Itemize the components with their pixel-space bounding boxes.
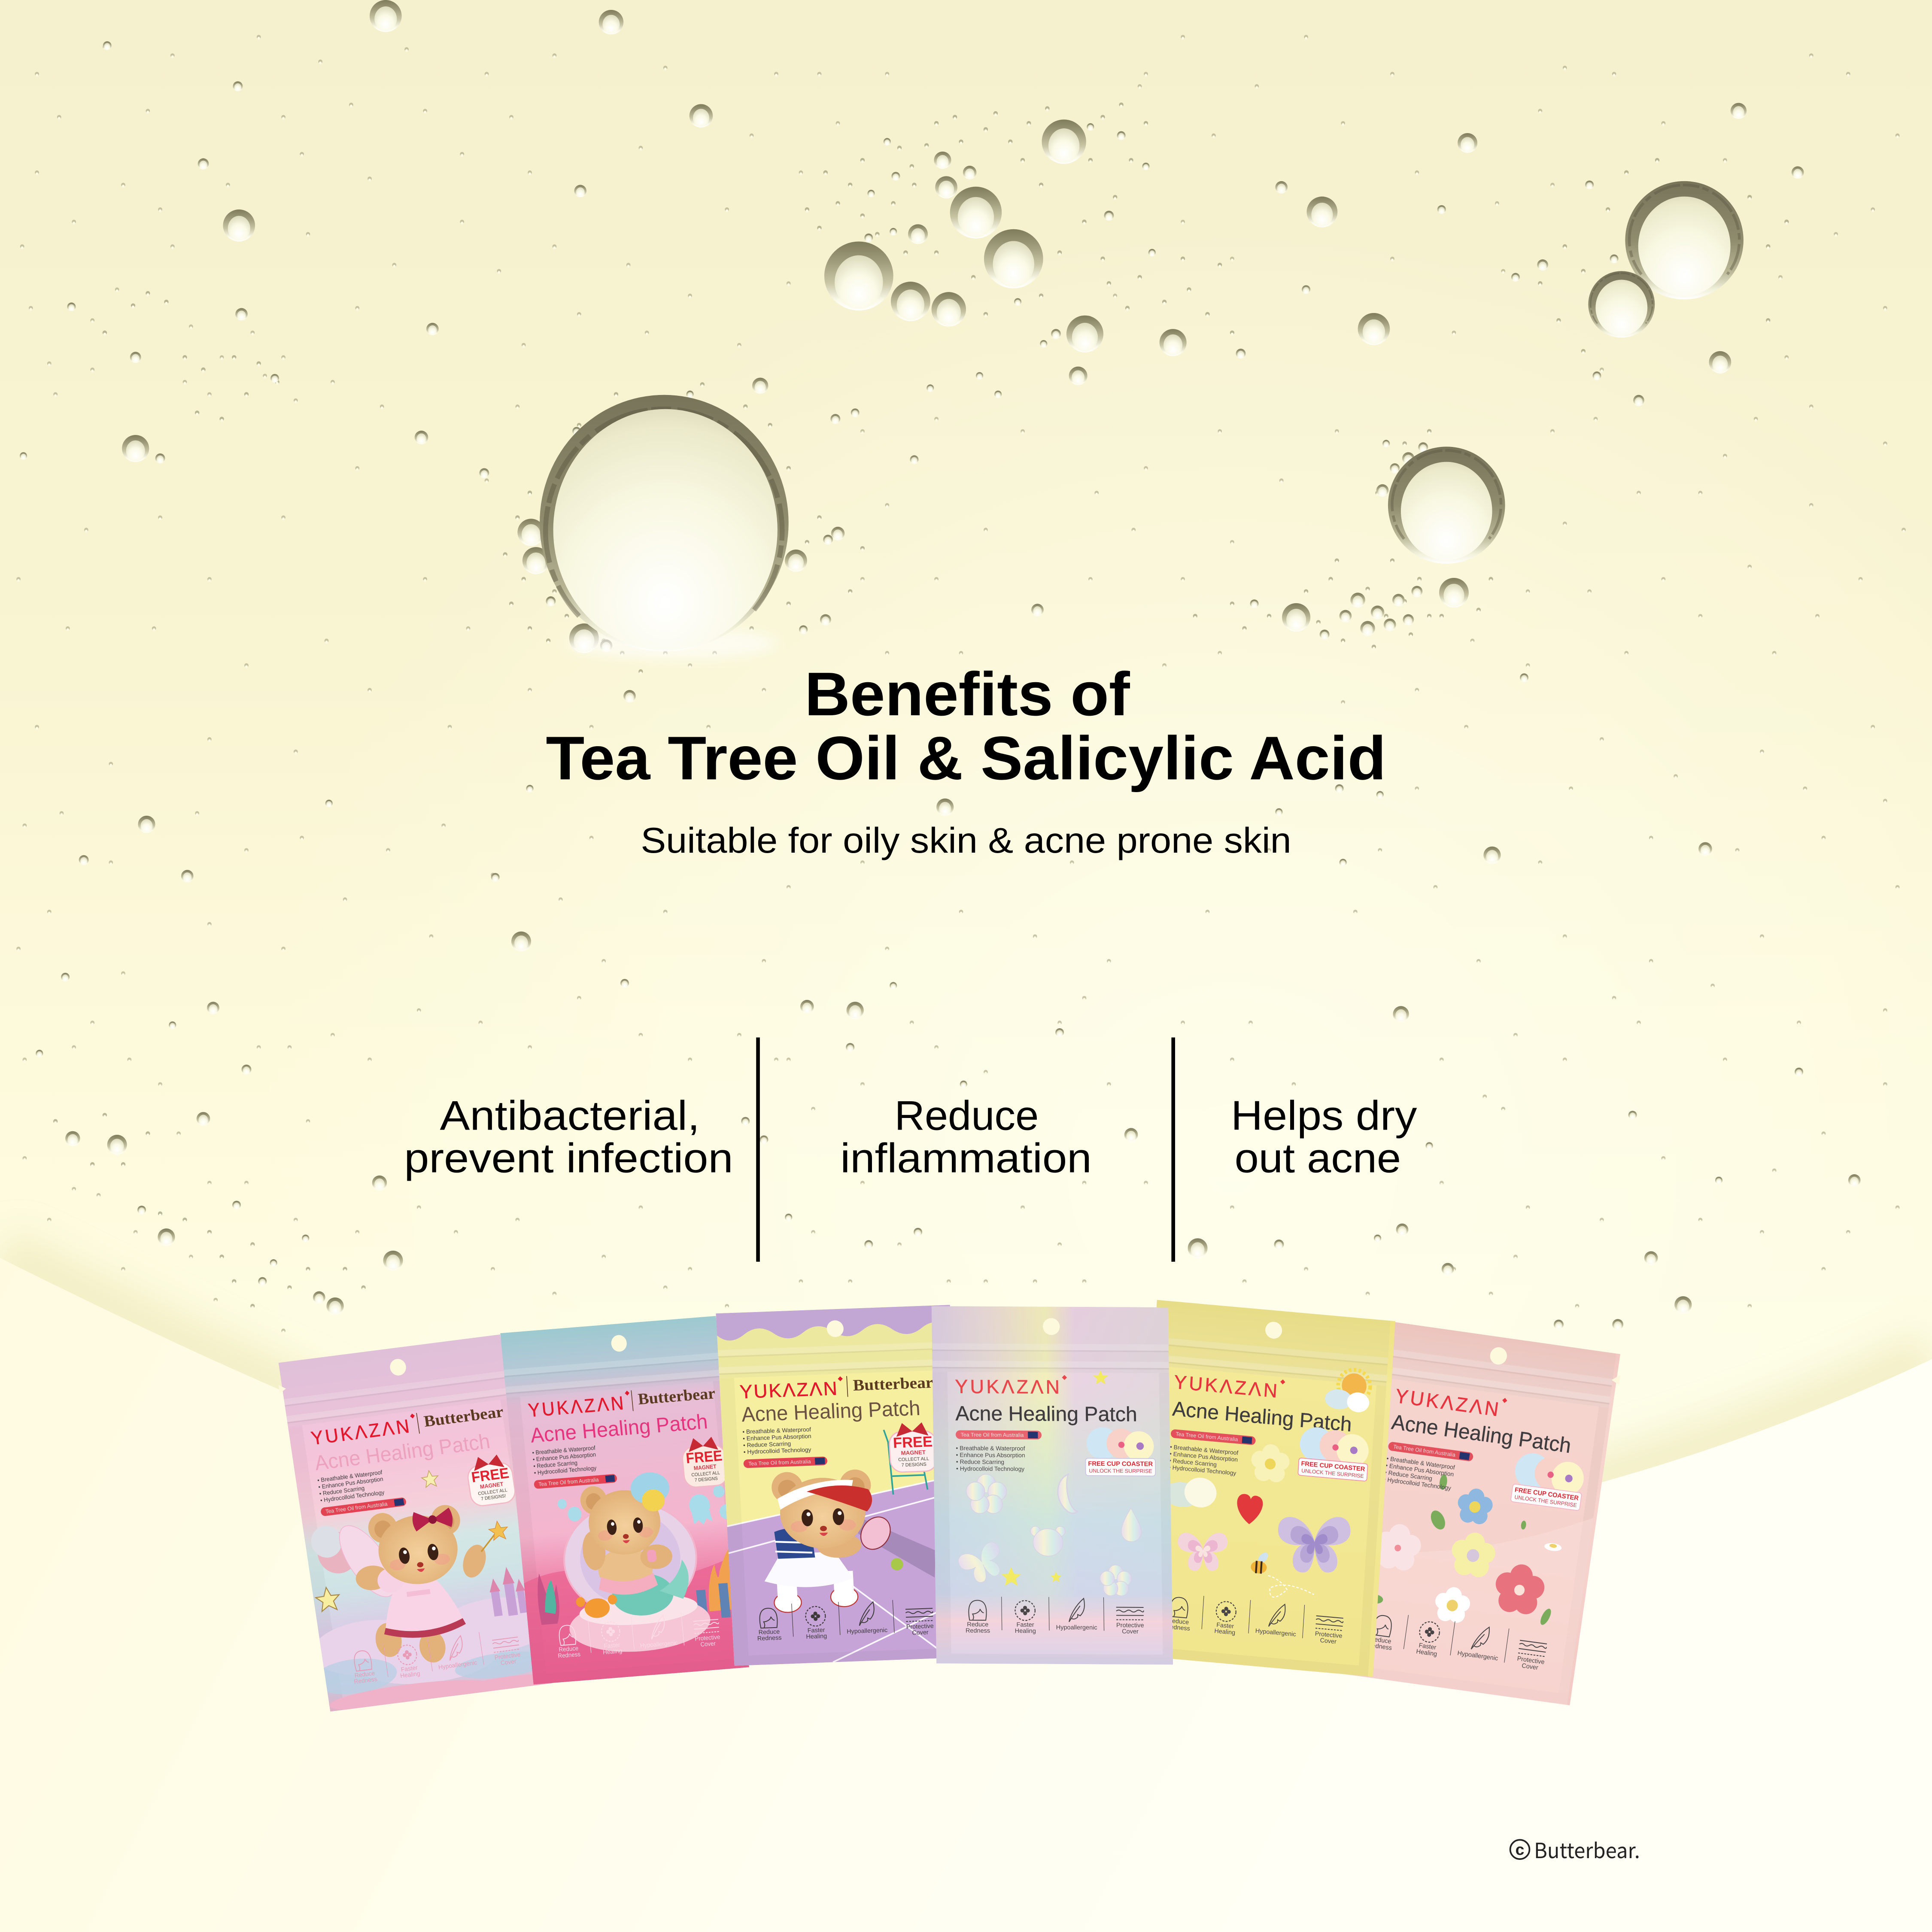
free magnet badge: COLLECT ALL: [898, 1456, 929, 1462]
feature icons: Protective: [1517, 1656, 1545, 1666]
free magnet badge: [888, 1422, 938, 1473]
giant bubble: [540, 395, 789, 659]
court: [725, 1475, 969, 1666]
bowl shadow along curve: [0, 1258, 1932, 1565]
origin pill: Tea Tree Oil from Australia: [1176, 1431, 1238, 1443]
pink butterfly: [1178, 1533, 1228, 1571]
feature icons: Protective: [695, 1634, 720, 1642]
features: • Reduce Scarring: [743, 1440, 791, 1449]
feature icons: Faster: [1016, 1622, 1034, 1628]
free magnet badge: FREE: [893, 1434, 933, 1451]
features: • Enhance Pus Absorption: [318, 1476, 383, 1490]
feature icons: Hypoallergenic: [847, 1627, 887, 1635]
origin pill: [956, 1430, 1042, 1440]
open shell: [559, 1498, 702, 1620]
features: • Enhance Pus Absorption: [956, 1452, 1025, 1458]
crab: [576, 1594, 619, 1619]
title: Benefits of: [805, 660, 1130, 729]
feature icons: Healing: [603, 1647, 623, 1656]
coaster sticker: [1510, 1451, 1586, 1511]
feature icons: Reduce: [1167, 1617, 1189, 1626]
features: • Hydrocolloid Technology: [320, 1489, 385, 1504]
feature icons: Cover: [500, 1658, 517, 1666]
feature icons: Healing: [806, 1633, 827, 1640]
feature icons: Faster: [1419, 1642, 1437, 1651]
small bubbles: [20, 0, 1861, 1330]
feature icons: Reduce: [559, 1645, 579, 1653]
fairy bear: [339, 1505, 508, 1662]
feature icons: Faster: [1216, 1622, 1234, 1630]
free magnet badge: 7 DESIGNS: [901, 1462, 927, 1468]
feature icons: [756, 1598, 934, 1642]
coaster sticker: FREE CUP COASTER: [1514, 1486, 1579, 1502]
features: [742, 1426, 812, 1455]
origin pill: [1388, 1441, 1473, 1461]
features: • Reduce Scarring: [1384, 1469, 1433, 1482]
features: • Enhance Pus Absorption: [743, 1433, 811, 1442]
copyright: Butterbear.: [1534, 1834, 1640, 1865]
features: • Breathable & Waterproof: [532, 1444, 596, 1456]
feature icons: Hypoallergenic: [438, 1659, 477, 1671]
origin pill: [743, 1456, 827, 1468]
pack edge notches: [279, 1375, 1620, 1394]
large bubbles right: [1388, 181, 1744, 564]
features: • Reduce Scarring: [533, 1459, 578, 1470]
feature icons: Cover: [1521, 1662, 1539, 1671]
origin pill: [1170, 1429, 1256, 1445]
benefit: reduce inflammation: [840, 1093, 1092, 1182]
feature icons: Healing: [400, 1670, 420, 1679]
tiny speck bubbles: [18, 37, 1904, 1332]
feature icons: Cover: [1320, 1637, 1337, 1645]
origin pill: [534, 1474, 617, 1489]
brand logo: YUKΛZΛN: [955, 1376, 1060, 1398]
origin pill: Tea Tree Oil from Australia: [1393, 1444, 1456, 1458]
title: Tea Tree Oil & Salicylic Acid: [546, 724, 1386, 793]
features: [1383, 1455, 1455, 1492]
pack 3: tennis: [716, 1305, 969, 1666]
brand logo: YUKΛZΛN: [739, 1378, 838, 1403]
feature icons: Redness: [1166, 1623, 1190, 1632]
pack 1: fairy: Butterbear: [422, 1403, 504, 1430]
purple butterfly: [1278, 1517, 1352, 1573]
pack 1: fairy: [278, 1334, 552, 1711]
feature icons: Redness: [353, 1675, 377, 1685]
origin pill: Tea Tree Oil from Australia: [538, 1476, 599, 1488]
castle: [489, 1567, 527, 1617]
holographic shapes: [955, 1473, 1142, 1596]
free magnet badge: [680, 1436, 729, 1488]
feature icons: Hypoallergenic: [1255, 1628, 1296, 1638]
divider left: [756, 1037, 760, 1262]
product name: Acne Healing Patch: [529, 1410, 709, 1447]
net: [857, 1514, 937, 1580]
feature icons: Protective: [1116, 1622, 1144, 1629]
feature icons: Hypoallergenic: [1457, 1650, 1498, 1662]
features: • Breathable & Waterproof: [956, 1445, 1025, 1452]
feature icons: Faster: [807, 1627, 825, 1634]
feature icons: Redness: [1367, 1642, 1392, 1652]
product name: Acne Healing Patch: [1172, 1397, 1352, 1436]
benefit: antibacterial: prevent infection: [404, 1136, 733, 1182]
large bubble cluster top centre: [824, 119, 1103, 352]
brand logo: YUKΛZΛN: [310, 1416, 411, 1449]
feature icons: [965, 1597, 1144, 1635]
features: • Breathable & Waterproof: [317, 1469, 383, 1484]
benefit: reduce inflammation: inflammation: [840, 1136, 1092, 1182]
coaster sticker: UNLOCK THE SURPRISE: [1514, 1494, 1577, 1508]
features: • Hydrocolloid Technology: [1383, 1476, 1452, 1492]
free magnet badge: MAGNET: [480, 1481, 504, 1490]
features: • Breathable & Waterproof: [1386, 1455, 1455, 1471]
benefit: reduce inflammation: Reduce: [895, 1093, 1039, 1139]
feature icons: Healing: [1214, 1628, 1236, 1636]
copyright: c: [1516, 1841, 1524, 1859]
origin pill: [320, 1497, 407, 1516]
scalloped top: [716, 1305, 951, 1341]
benefit: antibacterial: [404, 1093, 733, 1182]
feature icons: Cover: [700, 1640, 716, 1648]
features: • Reduce Scarring: [956, 1458, 1004, 1465]
features: • Hydrocolloid Technology: [1169, 1464, 1236, 1476]
product name: Acne Healing Patch: [1390, 1410, 1573, 1458]
feature icons: Reduce: [758, 1628, 780, 1636]
features: • Enhance Pus Absorption: [1170, 1450, 1238, 1463]
clouds: [1163, 1474, 1217, 1510]
umpire chair: [884, 1428, 928, 1495]
benefit: helps dry out acne: out acne: [1235, 1136, 1401, 1182]
product name: Acne Healing Patch: [313, 1430, 492, 1475]
feature icons: Cover: [912, 1629, 929, 1637]
feature icons: Cover: [1122, 1628, 1139, 1635]
feature icons: Faster: [401, 1664, 418, 1673]
features: • Enhance Pus Absorption: [532, 1451, 596, 1463]
coaster sticker: [1298, 1426, 1370, 1481]
origin pill: Tea Tree Oil from Australia: [748, 1458, 811, 1467]
features: • Enhance Pus Absorption: [1385, 1462, 1454, 1478]
coaster sticker: UNLOCK THE SURPRISE: [1301, 1467, 1364, 1479]
origin pill: Tea Tree Oil from Australia: [325, 1501, 388, 1515]
coaster sticker: [1085, 1427, 1155, 1476]
free magnet badge: [465, 1453, 516, 1507]
benefit: helps dry out acne: Helps dry: [1231, 1093, 1417, 1139]
free magnet badge: MAGNET: [901, 1449, 926, 1456]
features: • Breathable & Waterproof: [1170, 1444, 1239, 1456]
feature icons: [1367, 1610, 1549, 1672]
origin pill: Tea Tree Oil from Australia: [960, 1432, 1024, 1438]
sporty bear: [759, 1468, 905, 1613]
features: • Hydrocolloid Technology: [956, 1465, 1024, 1472]
octopus: [688, 1493, 713, 1525]
free magnet badge: FREE: [685, 1448, 723, 1467]
product name: Acne Healing Patch: [955, 1402, 1137, 1426]
subtitle: Suitable for oily skin & acne prone skin: [641, 820, 1291, 860]
free magnet badge: COLLECT ALL: [691, 1470, 720, 1478]
heart: [1236, 1493, 1264, 1525]
brand logo: YUKΛZΛN: [1173, 1372, 1278, 1402]
feature icons: [349, 1627, 522, 1685]
feature icons: Protective: [1315, 1631, 1343, 1640]
pack 5: yellow butterflies: [1135, 1300, 1395, 1677]
features: • Breathable & Waterproof: [742, 1426, 811, 1435]
title: [546, 660, 1386, 793]
feature icons: [1166, 1593, 1344, 1646]
feature icons: Hypoallergenic: [640, 1639, 678, 1649]
features: [1169, 1444, 1239, 1476]
feature icons: Reduce: [354, 1669, 375, 1679]
coaster sticker: FREE CUP COASTER: [1301, 1460, 1365, 1473]
features: • Reduce Scarring: [1169, 1457, 1217, 1468]
coral: [535, 1548, 737, 1632]
benefit: antibacterial: Antibacterial,: [440, 1093, 700, 1139]
features: • Reduce Scarring: [319, 1485, 365, 1497]
divider right: [1171, 1037, 1175, 1262]
foreground white bowl: [0, 1258, 1932, 1932]
feature icons: Faster: [604, 1641, 620, 1649]
feature icons: Redness: [757, 1634, 782, 1642]
coaster sticker: FREE CUP COASTER: [1088, 1461, 1153, 1468]
pack 6: floral pink: [1281, 1291, 1644, 1735]
free magnet badge: 7 DESIGNS: [695, 1476, 718, 1483]
brand logo: YUKΛZΛN: [527, 1392, 625, 1422]
feature icons: Reduce: [1370, 1635, 1391, 1645]
pack 4: holographic: [932, 1306, 1173, 1665]
feature icons: Redness: [966, 1628, 990, 1634]
pack 3: tennis: Butterbear: [853, 1374, 933, 1394]
flowers: [1320, 1462, 1597, 1719]
features: • Hydrocolloid Technology: [534, 1464, 597, 1476]
bee: [1250, 1549, 1270, 1574]
brand logo: YUKΛZΛN: [1394, 1385, 1500, 1421]
pack 2: mermaid: [500, 1316, 749, 1684]
free magnet badge: 7 DESIGNS!: [481, 1493, 506, 1502]
mermaid bear: [576, 1470, 692, 1620]
feature icons: Redness: [558, 1651, 581, 1659]
feature icons: Hypoallergenic: [1056, 1624, 1097, 1631]
sun and clouds: [1324, 1367, 1371, 1413]
features: • Hydrocolloid Technology: [743, 1446, 811, 1455]
free magnet badge: COLLECT ALL: [478, 1488, 507, 1497]
free magnet badge: FREE: [471, 1465, 510, 1486]
feature icons: Reduce: [967, 1621, 988, 1628]
feature icons: Healing: [1416, 1648, 1437, 1658]
features: [956, 1445, 1025, 1472]
coaster sticker: UNLOCK THE SURPRISE: [1089, 1468, 1152, 1474]
benefit: helps dry out acne: [1231, 1093, 1417, 1182]
feature icons: Protective: [906, 1623, 934, 1631]
product name: Acne Healing Patch: [741, 1397, 921, 1426]
feature icons: [555, 1610, 721, 1659]
features: [532, 1444, 598, 1476]
features: [317, 1469, 386, 1504]
pack 2: mermaid: Butterbear: [637, 1384, 716, 1408]
feature icons: Healing: [1015, 1628, 1036, 1634]
feature icons: Protective: [494, 1651, 521, 1661]
free magnet badge: MAGNET: [693, 1464, 717, 1471]
